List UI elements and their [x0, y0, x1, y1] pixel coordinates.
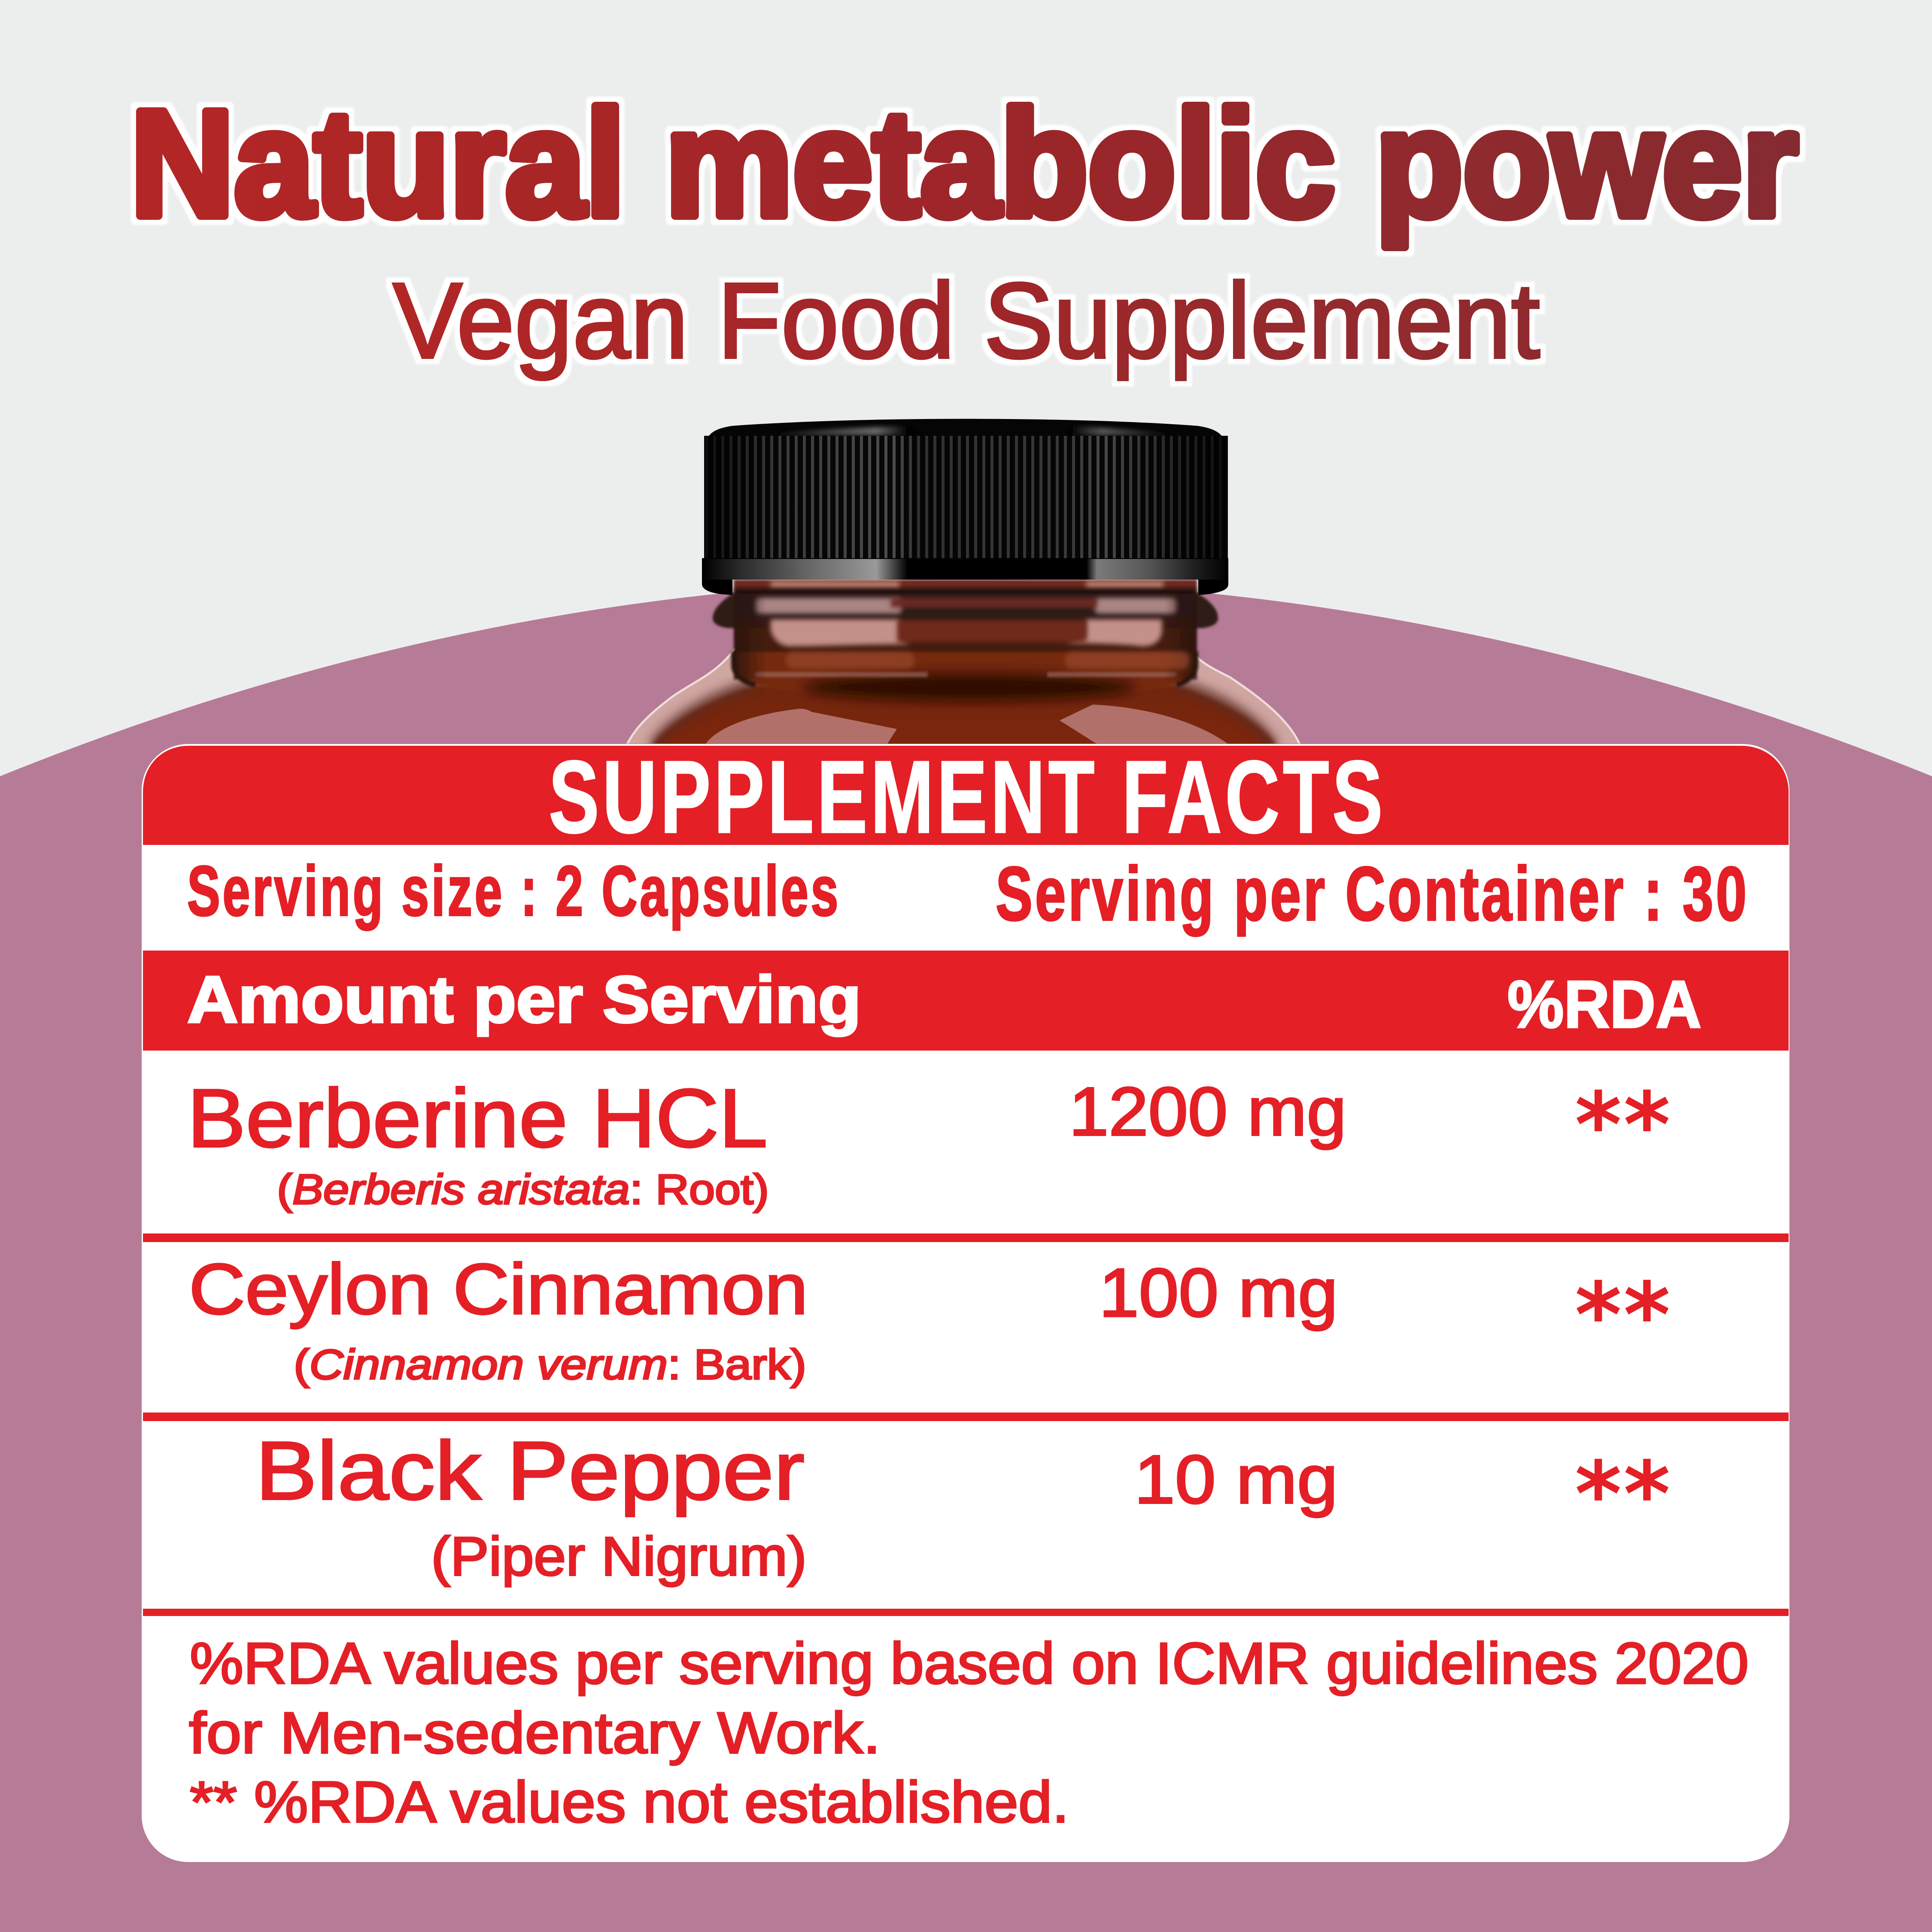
subtitle: Vegan Food Supplement: [393, 261, 1540, 380]
rda: **: [1575, 1443, 1672, 1547]
bottle glass body: [626, 648, 1301, 749]
divider line: [143, 1413, 1789, 1421]
footnote line 1: %RDA values per serving based on ICMR guidelines 2020: [190, 1631, 1749, 1696]
ingredient name: Black Pepper: [255, 1424, 805, 1517]
amount header band: [143, 951, 1789, 1051]
footnote: [189, 1631, 1749, 1835]
divider line: [143, 1609, 1789, 1616]
label: %RDA: %RDA: [1507, 967, 1701, 1042]
mauve arc background: [0, 581, 1932, 1932]
label: amount per serving: Amount per Serving: [187, 963, 861, 1036]
bottle cap: [702, 419, 1228, 595]
serving size: Serving size : 2 Capsules: [187, 851, 841, 930]
ingredient source: (Cinnamon verum : Bark): [294, 1341, 806, 1388]
ingredient name: Berberine HCL: [187, 1072, 768, 1164]
rda: **: [1575, 1073, 1672, 1178]
row: berberine: [187, 1072, 1672, 1213]
footnote line 3: ** %RDA values not established.: [190, 1769, 1069, 1835]
ingredient source: (Piper Nigrum): [431, 1526, 807, 1587]
footnote line 2: for Men-sedentary Work.: [189, 1700, 881, 1765]
panel card: [142, 744, 1789, 1862]
row: black pepper: [255, 1424, 1672, 1587]
divider line: [143, 1233, 1789, 1242]
table header band: [143, 746, 1789, 845]
title: Natural metabolic power: [131, 79, 1798, 249]
rda: **: [1575, 1264, 1672, 1368]
amount: 10 mg: [1134, 1441, 1338, 1518]
amount: 1200 mg: [1069, 1073, 1346, 1150]
bottle neck: [713, 580, 1218, 702]
panel: supplement facts: [142, 739, 1789, 1862]
ingredient source: (Berberis aristata : Root): [277, 1166, 769, 1213]
heading: supplement facts: SUPPLEMENT FACTS: [549, 739, 1386, 854]
amount: 100 mg: [1099, 1254, 1338, 1331]
bottle image: [626, 419, 1301, 749]
row: cinnamon: [189, 1249, 1672, 1388]
ingredient name: Ceylon Cinnamon: [189, 1249, 808, 1329]
